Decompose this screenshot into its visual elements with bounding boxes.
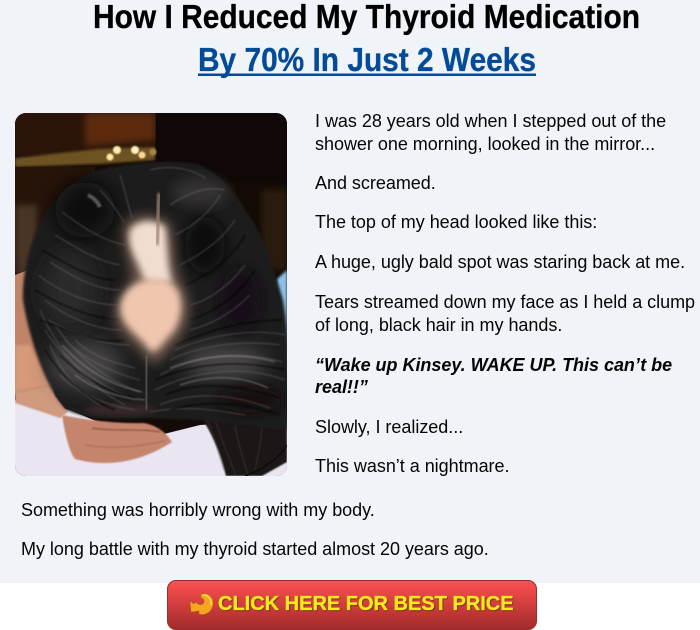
- white cloth: [15, 400, 287, 476]
- background room: [15, 113, 287, 476]
- button: click here for best price: [167, 580, 537, 630]
- heading line 2: By 70% In Just 2 Weeks: [198, 41, 536, 78]
- bright strands: [62, 195, 275, 400]
- paragraph: Tears streamed: [315, 292, 695, 335]
- hair shading: [35, 168, 285, 415]
- parting: [157, 193, 159, 245]
- photo: bald spot on the top of a head: [15, 113, 287, 476]
- grey strands: [38, 168, 285, 415]
- title: [93, 0, 640, 78]
- paragraph: I was 28 years old: [315, 111, 666, 154]
- paragraph: My long battle: My long battle with my thyroid started almost 20 years ago.: [21, 539, 489, 559]
- paragraph: The top of my head: The top of my head looked like this:: [315, 212, 597, 232]
- paragraph: Slowly, I realized: Slowly, I realized...: [315, 417, 463, 437]
- paragraph: bold italic quote: “Wake up Kinsey. WAKE UP. This can’t be: [315, 355, 672, 375]
- chandelier lights: [106, 146, 156, 160]
- hair tail: [204, 420, 287, 476]
- paragraph: I was 28 years old: I was 28 years old when I stepped out of the: [315, 111, 666, 131]
- paragraph: bold italic quote: [315, 355, 672, 397]
- paragraph: And screamed: And screamed.: [315, 173, 436, 193]
- paragraph: Tears streamed: Tears streamed down my face as I held a clump: [315, 292, 695, 312]
- paragraph: Tears streamed: of long, black hair in my hands.: [315, 315, 562, 335]
- forearm: [15, 386, 68, 418]
- head hair mass: [23, 162, 288, 430]
- paragraph: I was 28 years old: shower one morning, looked in the mirror...: [315, 134, 655, 154]
- hand: [62, 415, 172, 463]
- bald spot: [115, 193, 188, 410]
- paragraph: A huge, ugly bald spot: A huge, ugly bald spot was staring back at me.: [315, 252, 685, 272]
- paragraph: bold italic quote: real!!”: [315, 377, 368, 397]
- dark strands: [35, 235, 285, 415]
- button label: CLICK HERE FOR BEST PRICE: [218, 593, 514, 615]
- arm: [15, 270, 55, 395]
- paragraph: Something was horribly wrong: Something was horribly wrong with my body.: [21, 500, 375, 520]
- paragraph: This wasn't a nightmare: This wasn’t a nightmare.: [315, 456, 509, 476]
- icon: orange curved arrow: [190, 593, 214, 615]
- blue background right: [276, 270, 287, 375]
